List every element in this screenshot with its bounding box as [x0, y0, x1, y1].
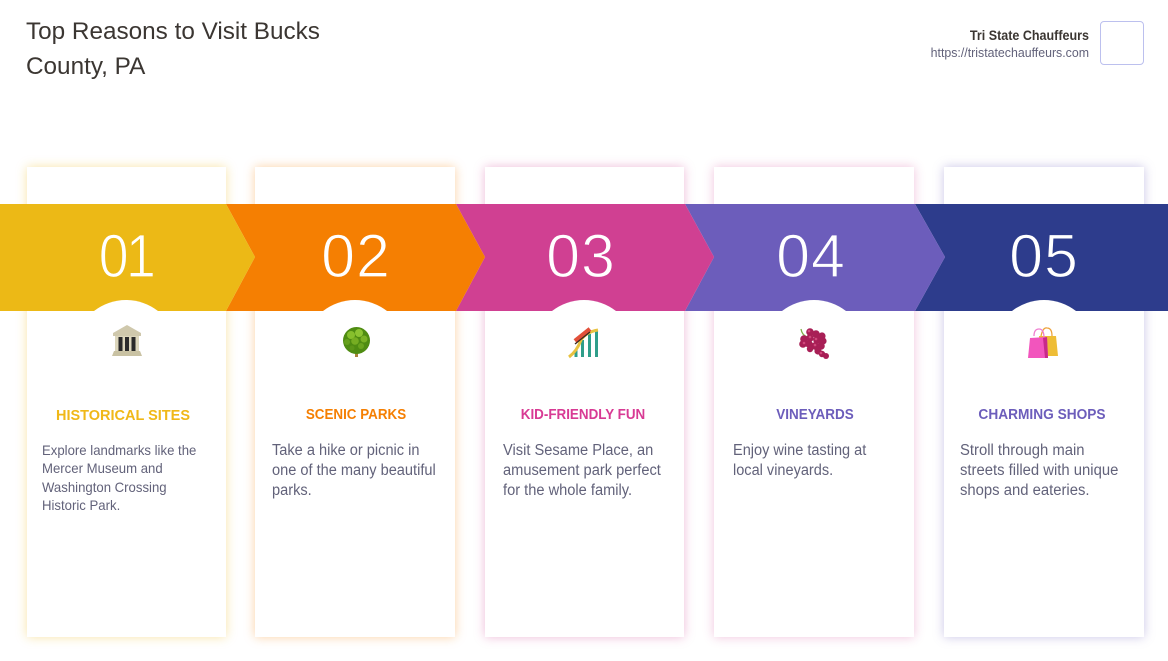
text: charming shops: Stroll through main	[960, 442, 1085, 459]
text: scenic parks: parks.	[272, 482, 312, 499]
icon: shopping bags	[1028, 327, 1058, 358]
text: historical sites: Explore landmarks like the	[42, 442, 196, 458]
text: charming shops	[960, 442, 1118, 499]
panel: card 3	[485, 167, 684, 637]
number 02: 02	[321, 222, 391, 290]
brand url: https://tristatechauffeurs.com	[931, 45, 1089, 60]
text: historical sites: Mercer Museum and	[42, 460, 163, 476]
logo placeholder box	[1100, 21, 1144, 65]
text: scenic parks: Take a hike or picnic in	[272, 442, 419, 459]
panel: card 4	[714, 167, 914, 637]
heading: charming shops: CHARMING SHOPS	[978, 407, 1106, 423]
number 04: 04	[776, 222, 846, 290]
icon: classical building	[112, 325, 142, 356]
panel: card 2	[255, 167, 455, 637]
title: Top Reasons to Visit Bucks	[26, 18, 320, 45]
heading: kid-friendly fun: KID-FRIENDLY FUN	[521, 407, 645, 423]
text: scenic parks	[272, 442, 436, 499]
text: kid-friendly fun: for the whole family.	[503, 482, 632, 499]
text: vineyards: local vineyards.	[733, 462, 833, 479]
heading: scenic parks: SCENIC PARKS	[306, 407, 406, 423]
title: County, PA	[26, 53, 145, 80]
text: vineyards	[733, 442, 866, 479]
icon: tree	[343, 327, 370, 357]
heading: historical sites: HISTORICAL SITES	[56, 408, 190, 424]
text: historical sites: Historic Park.	[42, 497, 120, 513]
text: kid-friendly fun: amusement park perfect	[503, 462, 661, 479]
text: historical sites	[42, 442, 196, 513]
text: charming shops: shops and eateries.	[960, 482, 1090, 499]
number 03: 03	[546, 222, 616, 290]
icon: roller coaster	[568, 327, 598, 358]
text: vineyards: Enjoy wine tasting at	[733, 442, 866, 459]
number 01: 01	[99, 222, 153, 290]
text: charming shops: streets filled with unique	[960, 462, 1118, 479]
text: kid-friendly fun	[503, 442, 661, 499]
text: scenic parks: one of the many beautiful	[272, 462, 436, 479]
icon: grapes	[799, 328, 829, 359]
text: kid-friendly fun: Visit Sesame Place, an	[503, 442, 653, 459]
panel: card 1	[27, 167, 226, 637]
text: historical sites: Washington Crossing	[42, 479, 167, 495]
title	[26, 18, 320, 80]
brand name: Tri State Chauffeurs	[970, 27, 1089, 43]
number 05: 05	[1009, 222, 1079, 290]
panel: card 5	[944, 167, 1144, 637]
heading: vineyards: VINEYARDS	[776, 407, 854, 423]
